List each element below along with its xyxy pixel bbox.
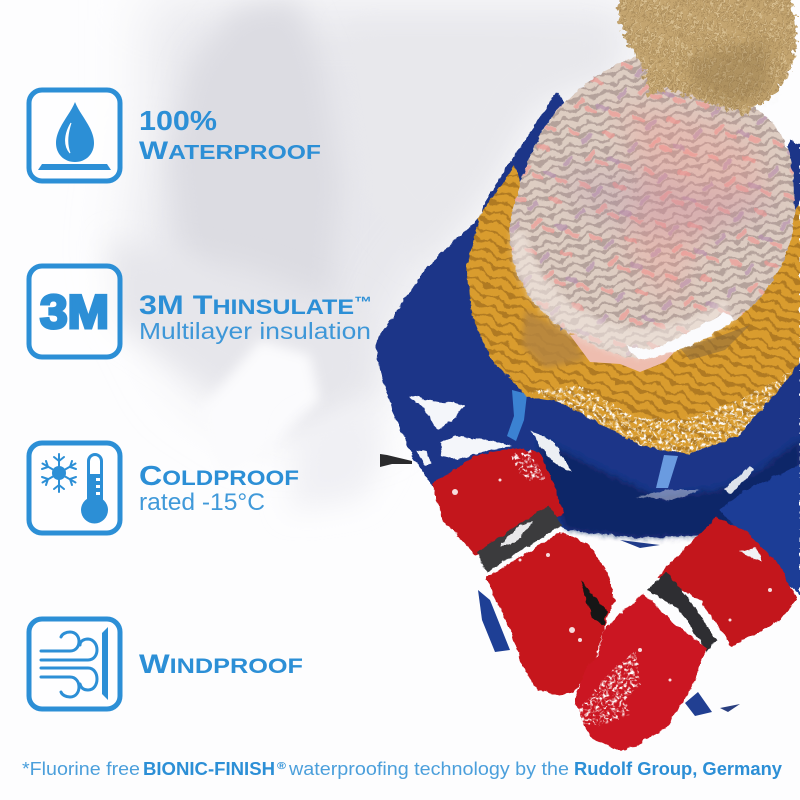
heading: 100% Waterproof <box>139 105 321 165</box>
icon: water drop <box>29 90 120 181</box>
icon: 3M logo: 3M <box>40 285 109 338</box>
footnote: waterproofing technology by the <box>288 758 569 779</box>
heading: Coldproof <box>139 460 299 516</box>
heading: 3M Thinsulate: Multilayer insulation <box>139 318 371 344</box>
footnote <box>22 758 783 779</box>
snow patches on sleeve <box>408 396 512 466</box>
heading: Windproof: WINDPROOF <box>139 649 303 679</box>
footnote: BIONIC-FINISH <box>143 758 275 779</box>
feature: coldproof <box>29 443 299 533</box>
heading: 3M Thinsulate: ™ <box>354 294 372 311</box>
jacket cord toggle <box>380 454 412 467</box>
feature: 3M Thinsulate <box>29 266 372 357</box>
feature: windproof <box>29 619 303 709</box>
feature: 100% waterproof <box>29 90 321 181</box>
icon: wind against wall <box>29 619 120 709</box>
heading: 3M Thinsulate <box>139 290 372 344</box>
heading: 100% Waterproof: 100% <box>139 105 217 136</box>
footnote: *Fluorine free <box>22 758 140 779</box>
left mitten <box>432 448 615 696</box>
child in snowsuit photo <box>376 0 800 751</box>
hair and face <box>522 310 750 372</box>
heading: 3M Thinsulate: 3M T HINSULATE <box>139 290 331 320</box>
jacket <box>376 92 800 596</box>
scarf <box>467 165 800 454</box>
heading: 100% Waterproof: W ATERPROOF <box>139 137 321 165</box>
blue zip pulls <box>507 390 678 488</box>
heading: Coldproof: rated -15°C <box>139 489 265 516</box>
right mitten <box>574 517 797 751</box>
footnote: ® <box>277 761 287 772</box>
icon: snowflake and thermometer <box>29 443 120 533</box>
icon: 3M logo <box>29 266 120 357</box>
footnote: Rudolf Group, Germany <box>574 758 783 779</box>
snow speckle and dug-out shadows <box>452 478 772 716</box>
fur pompom <box>618 0 798 114</box>
heading: Coldproof: COLDPROOF <box>139 460 299 491</box>
knit hat <box>510 56 794 360</box>
